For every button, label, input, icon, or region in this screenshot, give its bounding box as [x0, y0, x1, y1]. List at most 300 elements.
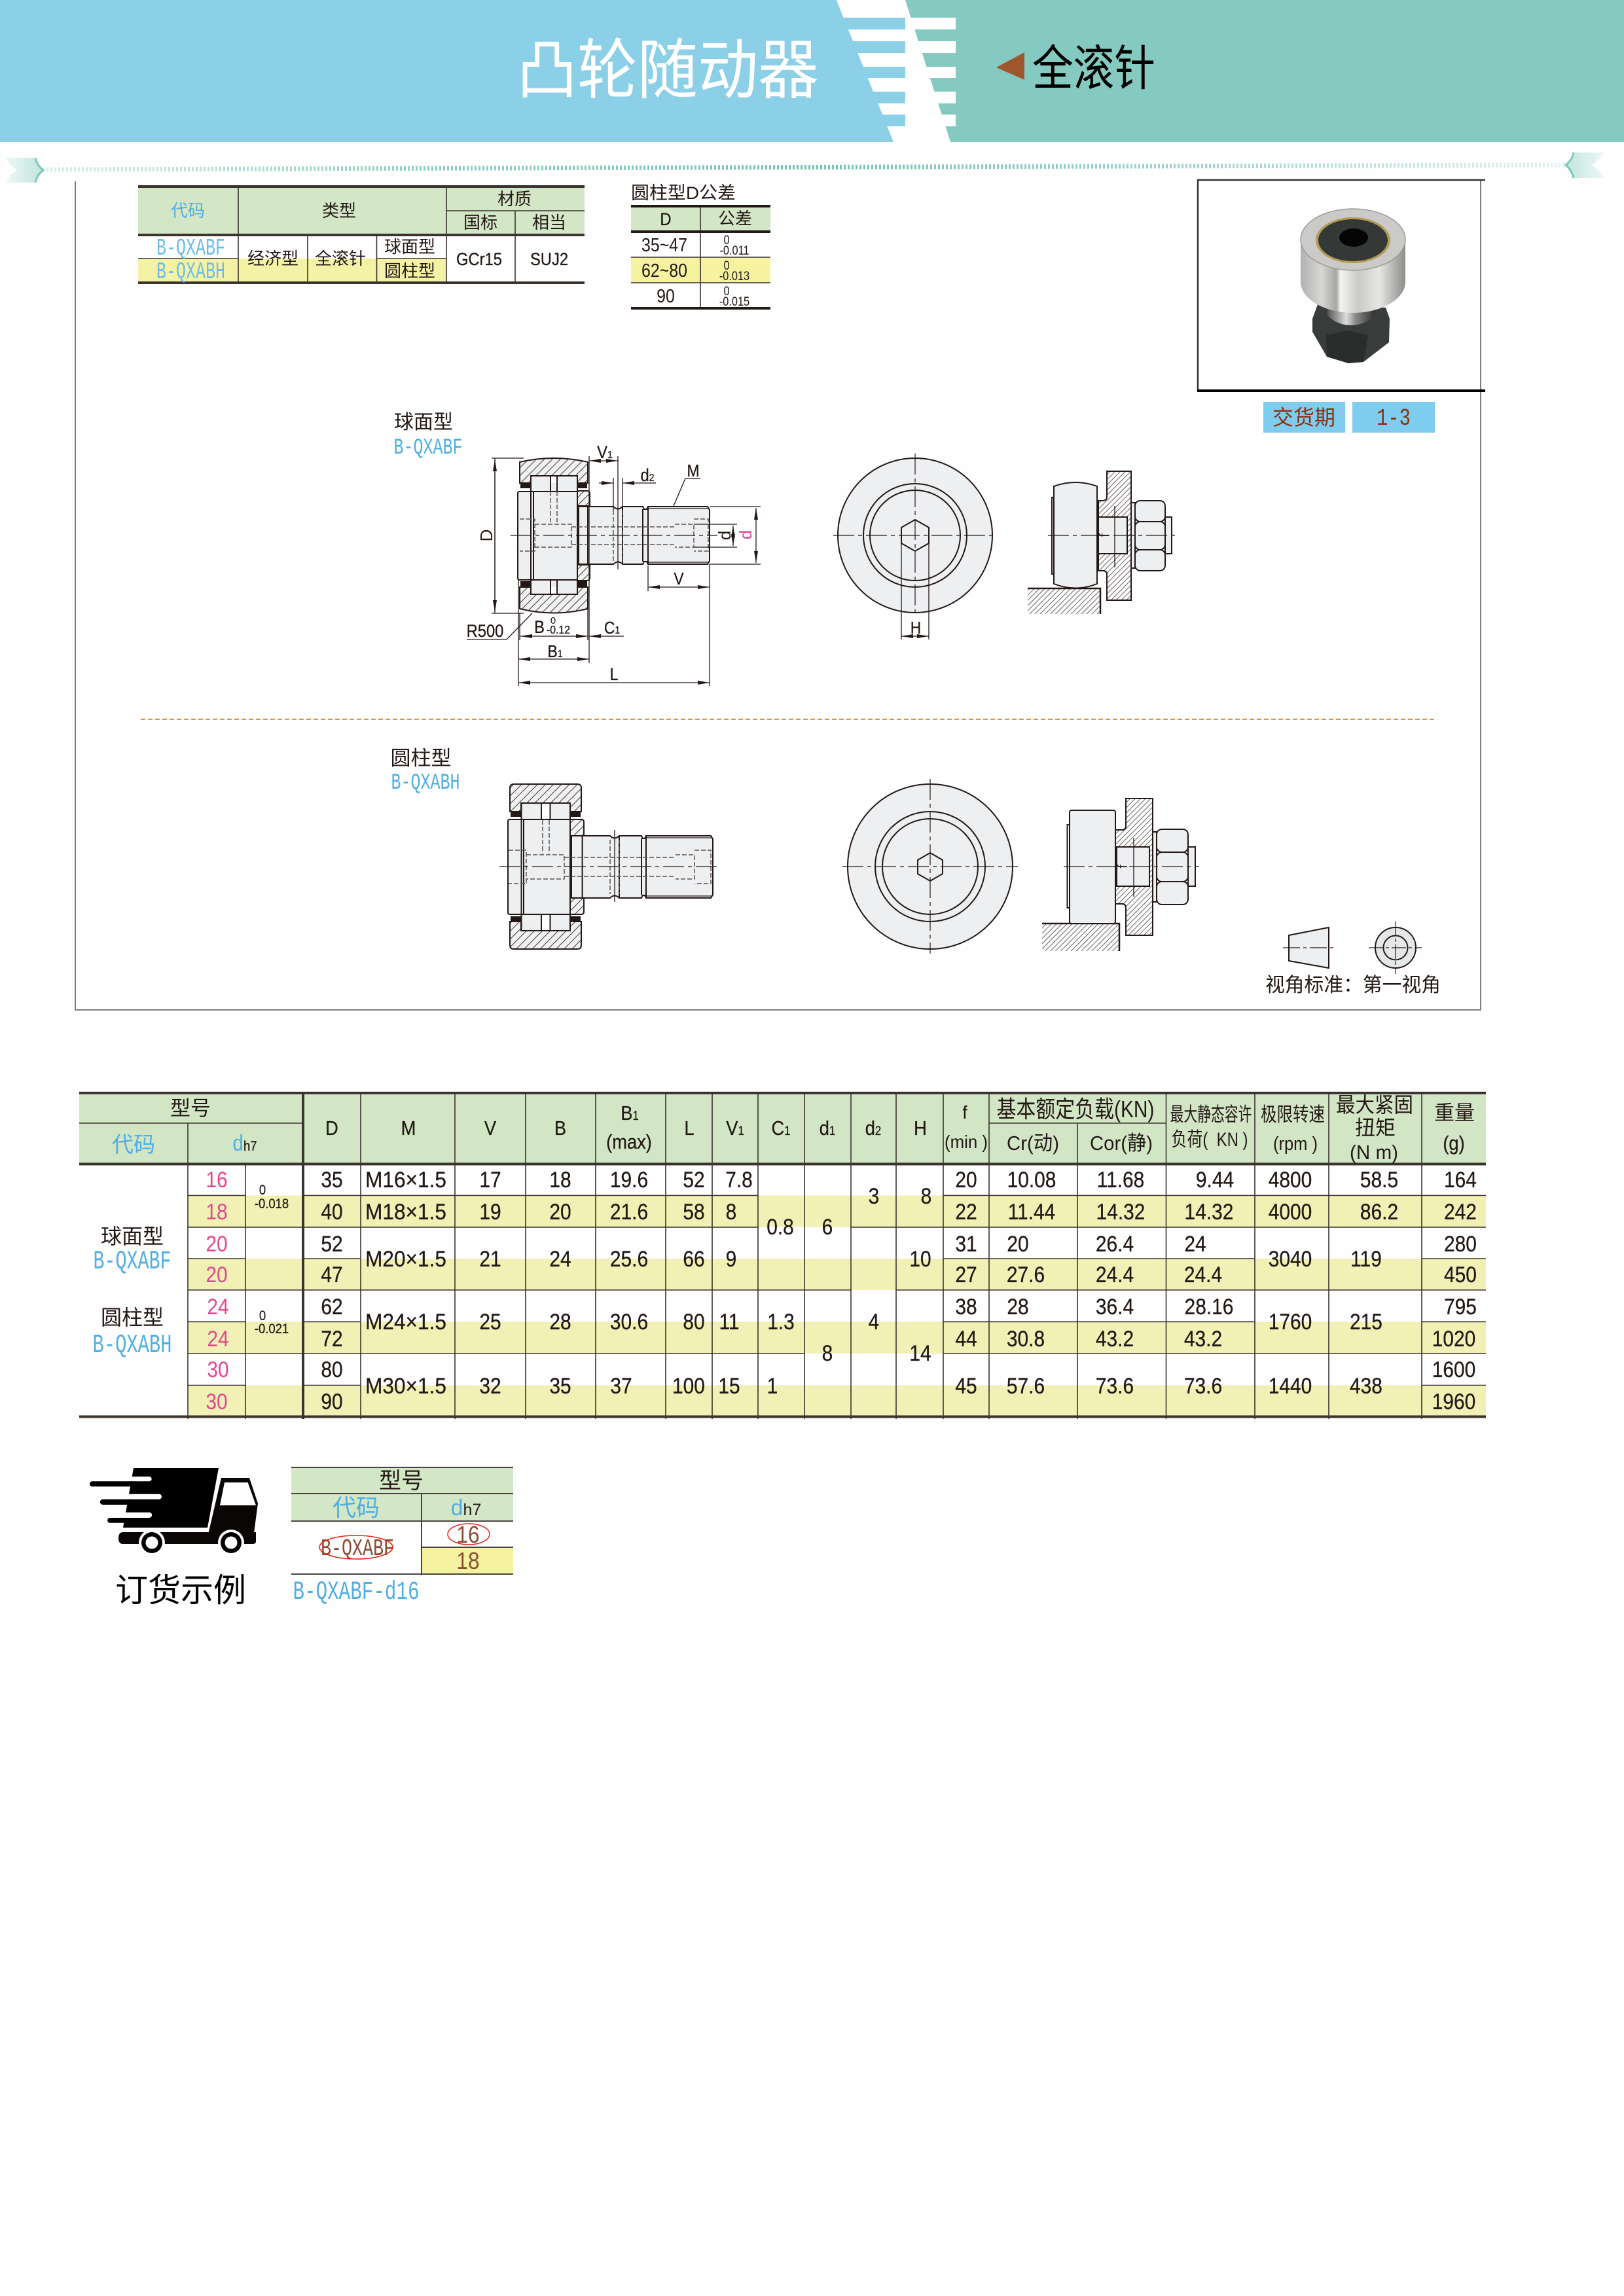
label V: V	[674, 570, 684, 588]
cone symbol	[1289, 927, 1329, 968]
value: 47	[321, 1262, 343, 1287]
shaft	[579, 507, 710, 564]
value: 0.8	[767, 1214, 794, 1239]
rpm heading: (rpm )	[1273, 1134, 1318, 1155]
value: 100	[672, 1373, 705, 1398]
header: blue left band	[0, 0, 893, 142]
truck box	[123, 1468, 219, 1528]
cylindrical type: 圆柱型	[101, 1306, 164, 1329]
d 20: 20	[206, 1231, 228, 1256]
tolerance value: -0.013	[719, 269, 749, 283]
left chevron edge	[35, 158, 43, 183]
cylindrical front view	[842, 779, 1018, 954]
material and type table	[138, 187, 585, 285]
value: 35	[321, 1167, 343, 1192]
V1 heading: V1	[726, 1117, 744, 1139]
code B-QXABF: B-QXABF	[156, 235, 225, 262]
value: 30.6	[610, 1309, 648, 1334]
heading: code: 代码	[171, 201, 205, 221]
max heading: (max)	[606, 1131, 652, 1153]
L column values	[672, 1167, 705, 1398]
zero: 0	[259, 1183, 266, 1198]
outer circle	[838, 458, 992, 613]
value: 438	[1350, 1373, 1382, 1398]
value: 4800	[1269, 1167, 1312, 1192]
hidden lines	[520, 492, 708, 562]
value: 3040	[1269, 1246, 1312, 1271]
value: 11.44	[1008, 1199, 1055, 1224]
icon: delivery truck	[90, 1468, 258, 1556]
heading: type: 类型	[322, 201, 356, 221]
cell: spherical: 球面型	[384, 237, 435, 257]
value: 10.08	[1007, 1167, 1056, 1192]
g heading: (g)	[1443, 1132, 1465, 1155]
dimension V1	[589, 460, 618, 461]
center line	[1048, 535, 1175, 536]
yellow row	[138, 259, 446, 283]
vertical rules	[188, 1093, 1422, 1419]
value: 73.6	[1184, 1373, 1222, 1398]
value: 52	[683, 1167, 705, 1192]
B heading: B	[554, 1117, 566, 1139]
value: 90	[321, 1389, 343, 1414]
value: 215	[1350, 1309, 1382, 1334]
value: M18×1.5	[365, 1199, 446, 1224]
icon: left chevron	[5, 158, 43, 183]
example header fill	[291, 1467, 513, 1521]
nut bottom segment	[1157, 882, 1188, 905]
tolerance thick rules	[631, 206, 770, 308]
label d pink: d	[736, 530, 755, 539]
d1 heading: d1	[820, 1117, 835, 1139]
heading: equivalent: 相当	[532, 213, 566, 232]
d 16: 16	[206, 1167, 228, 1192]
label d: d	[715, 531, 734, 540]
H column values	[909, 1183, 931, 1365]
stud head and body	[518, 492, 577, 580]
flange bottom	[570, 898, 584, 914]
stud shaft	[1098, 517, 1127, 554]
roller cap	[1052, 497, 1054, 574]
flange top	[577, 491, 590, 506]
dimension f	[1114, 506, 1115, 567]
f column values	[955, 1167, 977, 1398]
weight column values	[1432, 1167, 1477, 1414]
cell: GCr15: GCr15	[456, 250, 502, 269]
stud head and body	[508, 819, 570, 914]
B column values	[549, 1167, 571, 1398]
value: M16×1.5	[365, 1167, 446, 1192]
spherical code: B-QXABF	[394, 436, 462, 461]
roller top face	[1301, 209, 1405, 270]
cylindrical type label	[390, 747, 460, 796]
order example table	[291, 1467, 513, 1607]
value: 3	[869, 1183, 879, 1208]
legend text: 视角标准：第一视角	[1265, 975, 1441, 996]
value: 44	[955, 1326, 977, 1351]
rear wheel	[139, 1530, 165, 1556]
value: 20	[1007, 1231, 1029, 1256]
d 24: 24	[207, 1326, 229, 1351]
nut middle segment	[1157, 852, 1188, 882]
value: 21	[479, 1246, 501, 1271]
header banner	[0, 0, 1624, 142]
base block hatch	[1028, 588, 1100, 614]
front tire	[221, 1532, 242, 1553]
label B: B	[534, 618, 545, 637]
d 24: 24	[207, 1294, 229, 1319]
washer	[1153, 832, 1157, 902]
weight heading: 重量	[1434, 1102, 1475, 1124]
max torque heading: 最大紧固	[1336, 1093, 1413, 1117]
label M: M	[687, 462, 700, 480]
cam follower neck	[1327, 304, 1375, 325]
-0.018: -0.018	[255, 1196, 289, 1211]
brass ring	[1316, 217, 1390, 263]
d 30: 30	[206, 1389, 228, 1414]
heading tolerance: 公差	[718, 209, 752, 228]
N m heading: (N m)	[1350, 1141, 1398, 1164]
cylinder D tolerance table	[631, 183, 770, 310]
Cor heading: Cor(静)	[1090, 1132, 1153, 1155]
value: 28	[549, 1309, 571, 1334]
inner circle	[882, 819, 978, 914]
center line	[1064, 866, 1199, 867]
head separation	[531, 492, 533, 580]
cylindrical code: B-QXABH	[93, 1331, 171, 1361]
value: 19.6	[610, 1167, 648, 1192]
min heading: (min )	[945, 1132, 988, 1152]
value: M20×1.5	[365, 1246, 446, 1271]
value: 43.2	[1184, 1326, 1222, 1351]
dh7 heading: dh7	[232, 1130, 257, 1155]
cab	[203, 1478, 258, 1544]
value: 72	[321, 1326, 343, 1351]
value: 14.32	[1096, 1199, 1145, 1224]
circle around 16	[448, 1524, 490, 1545]
value: 280	[1444, 1231, 1477, 1256]
dimension d	[732, 526, 734, 546]
shaft steps	[579, 507, 648, 564]
roller	[1070, 810, 1115, 924]
outer ring top	[510, 784, 581, 812]
code B-QXABH: B-QXABH	[156, 259, 225, 285]
center lines	[833, 454, 997, 615]
f heading: f	[963, 1102, 967, 1122]
C1 column values	[767, 1214, 795, 1398]
value: 14.32	[1185, 1199, 1233, 1224]
product photo panel	[1197, 180, 1485, 391]
speed lines	[90, 1481, 134, 1523]
label H: H	[911, 619, 921, 637]
dimension L	[518, 682, 710, 683]
table grid	[138, 187, 585, 283]
value: 1600	[1432, 1357, 1475, 1382]
value: 30.8	[1007, 1326, 1045, 1351]
subtitle: 全滚针	[1032, 41, 1155, 96]
value: 24.4	[1184, 1262, 1222, 1287]
max static load heading: 最大静态容许	[1170, 1104, 1252, 1126]
thread line	[646, 838, 712, 896]
dimension C1	[589, 636, 624, 637]
stud end	[1165, 517, 1172, 554]
load KN heading: 负荷( KN )	[1172, 1129, 1248, 1151]
value: 18	[549, 1167, 571, 1192]
dimension B	[520, 636, 588, 637]
value: 26.4	[1096, 1231, 1134, 1256]
nut facet highlight	[1326, 331, 1368, 363]
yellow stripes	[188, 1195, 1486, 1416]
chassis	[118, 1532, 256, 1544]
delivery value	[1352, 402, 1435, 433]
base block outline	[1042, 924, 1119, 951]
value: 80	[321, 1357, 343, 1382]
dimension d2 left	[599, 482, 613, 484]
value: 8	[726, 1199, 736, 1224]
header: teal right band	[897, 0, 1624, 142]
value: 58	[683, 1199, 705, 1224]
V1 column values	[718, 1167, 753, 1398]
value: 62	[321, 1294, 343, 1319]
spherical type label	[394, 412, 462, 461]
value: 119	[1350, 1246, 1382, 1271]
washer	[1131, 503, 1135, 568]
value: 1020	[1432, 1326, 1475, 1351]
cam follower nut	[1312, 304, 1390, 363]
value: 73.6	[1096, 1373, 1134, 1398]
value: 86.2	[1360, 1199, 1398, 1224]
Cr heading: Cr(动)	[1007, 1132, 1059, 1155]
torque heading: 扭矩	[1355, 1117, 1396, 1139]
value: 9.44	[1196, 1167, 1234, 1192]
value: 1760	[1269, 1309, 1312, 1334]
thick rules	[79, 1092, 1486, 1419]
d 20: 20	[206, 1262, 228, 1287]
value: 58.5	[1360, 1167, 1398, 1192]
value: 14	[909, 1340, 931, 1365]
d2 heading: d2	[865, 1117, 881, 1139]
d values column	[206, 1167, 229, 1414]
value: 24.4	[1096, 1262, 1134, 1287]
table header fill	[138, 187, 585, 235]
value: 27.6	[1007, 1262, 1045, 1287]
0 value: 0	[723, 259, 730, 272]
model heading: 型号	[170, 1097, 211, 1120]
stud shaft	[1117, 847, 1149, 886]
value: 1.3	[767, 1309, 795, 1334]
icon: brown arrow	[996, 52, 1024, 80]
rated load heading: 基本额定负载(KN)	[996, 1096, 1155, 1122]
dimension f	[1133, 838, 1134, 897]
value: 450	[1444, 1262, 1477, 1287]
roller gaps	[551, 483, 556, 587]
C1 heading: C1	[771, 1117, 791, 1139]
value: 57.6	[1007, 1373, 1045, 1398]
value: 242	[1444, 1199, 1477, 1224]
nut middle segment	[1135, 522, 1165, 550]
cell: full needle: 全滚针	[315, 249, 366, 268]
label L: L	[610, 666, 618, 684]
center lines	[842, 779, 1018, 954]
inner circle	[870, 490, 960, 581]
tolerance table title: 圆柱型D公差	[631, 183, 736, 203]
0 value: 0	[723, 284, 730, 298]
value: 28.16	[1185, 1294, 1233, 1319]
heading: national standard: 国标	[463, 213, 497, 232]
value: 52	[321, 1231, 343, 1256]
value 18: 18	[456, 1548, 480, 1574]
rear tire	[141, 1532, 162, 1553]
dimension d2 right	[623, 482, 656, 484]
value: 66	[683, 1246, 705, 1271]
main specification table	[79, 1092, 1486, 1419]
table header row	[112, 1093, 1475, 1164]
speed column values	[1269, 1167, 1312, 1398]
value: 27	[955, 1262, 977, 1287]
rear hub	[145, 1537, 158, 1549]
value: 35	[549, 1373, 571, 1398]
value: 43.2	[1096, 1326, 1134, 1351]
label R500: R500	[467, 622, 503, 641]
front wheel halo	[218, 1530, 244, 1556]
head separation	[521, 819, 524, 914]
value: 20	[955, 1167, 977, 1192]
example yellow cell	[422, 1547, 513, 1574]
order example heading: 订货示例	[115, 1572, 246, 1609]
d 30: 30	[207, 1357, 229, 1382]
nut top segment	[1135, 501, 1165, 522]
shaft steps	[571, 836, 646, 898]
D 35~47: 35~47	[641, 234, 687, 255]
view standard legend	[1265, 922, 1441, 996]
stud end	[1188, 847, 1195, 886]
spherical heading: 球面型	[394, 412, 453, 433]
right chevron edge	[1566, 152, 1574, 178]
value: 15	[718, 1373, 740, 1398]
heading: material: 材质	[497, 189, 532, 209]
value: 8	[822, 1340, 833, 1365]
V heading: V	[484, 1117, 497, 1139]
rollers	[531, 476, 577, 594]
cone center line	[1283, 947, 1335, 948]
circle symbol inner	[1384, 936, 1407, 960]
value: 4	[869, 1309, 879, 1334]
cell: economy type: 经济型	[247, 249, 298, 268]
outer circle	[848, 784, 1013, 949]
delivery label text: 交货期	[1272, 406, 1335, 429]
mounting plate	[1098, 471, 1131, 600]
cylindrical section drawing	[499, 784, 719, 949]
zero: 0	[259, 1308, 266, 1323]
M column values	[365, 1167, 446, 1398]
header fill	[79, 1093, 1486, 1164]
header: white slanted stripe with teeth	[837, 0, 956, 142]
tolerance -0.12: -0.12	[547, 623, 570, 636]
value: 31	[955, 1231, 977, 1256]
heading dh7: dh7	[451, 1496, 481, 1520]
label f: f	[1098, 533, 1112, 537]
center line	[499, 866, 719, 867]
base block outline	[1028, 588, 1100, 614]
type labels column	[93, 1225, 171, 1361]
photo bottom rule	[1197, 389, 1485, 392]
leader R500	[467, 613, 532, 639]
d2 column values	[869, 1183, 879, 1334]
B1 heading: B1	[621, 1102, 639, 1124]
speed notches	[122, 1477, 162, 1518]
flange top	[570, 819, 584, 836]
header divider with chevrons	[5, 152, 1604, 183]
cylindrical code: B-QXABH	[391, 771, 460, 796]
nut bottom segment	[1135, 550, 1165, 571]
value: 11.68	[1097, 1167, 1144, 1192]
d 18: 18	[206, 1199, 228, 1224]
circle symbol outer	[1375, 927, 1416, 968]
tolerance yellow row	[631, 257, 770, 283]
value: M30×1.5	[365, 1373, 446, 1398]
value: 11	[719, 1309, 740, 1334]
label D: D	[477, 529, 496, 541]
hex socket	[901, 520, 929, 551]
value: 24	[549, 1246, 571, 1271]
value: 10	[909, 1246, 931, 1271]
h7 tolerance column	[255, 1183, 289, 1336]
base block hatch	[1042, 924, 1119, 951]
value: 25	[479, 1309, 501, 1334]
dimension H right	[915, 636, 929, 637]
D column values	[321, 1167, 343, 1414]
middle circle	[863, 484, 967, 587]
heading model: 型号	[379, 1469, 424, 1494]
hex socket	[1339, 228, 1368, 247]
value: 25.6	[610, 1246, 648, 1271]
tolerance value: -0.015	[719, 295, 749, 308]
thread line	[648, 509, 708, 562]
H heading: H	[914, 1117, 927, 1139]
value: 24	[1184, 1231, 1206, 1256]
leader M	[674, 478, 700, 506]
dimension H	[901, 636, 915, 637]
rear wheel halo	[139, 1530, 165, 1556]
L heading: L	[684, 1117, 695, 1139]
front hub	[225, 1537, 237, 1549]
dimension H extensions	[901, 543, 929, 639]
spherical type: 球面型	[101, 1225, 164, 1248]
code heading: 代码	[112, 1132, 155, 1157]
value: 22	[955, 1199, 977, 1224]
value: 28	[1007, 1294, 1029, 1319]
heading code: 代码	[333, 1494, 380, 1521]
dimension V	[648, 586, 710, 588]
divider between variants	[141, 719, 1435, 720]
value: 4000	[1269, 1199, 1312, 1224]
roller	[1054, 482, 1097, 588]
value: 795	[1444, 1294, 1477, 1319]
icon: right chevron	[1566, 152, 1604, 178]
value: 40	[321, 1199, 343, 1224]
spherical code: B-QXABF	[93, 1247, 171, 1277]
groove mark	[614, 830, 615, 902]
panel frame	[75, 180, 1481, 1010]
value: 45	[955, 1373, 977, 1398]
delivery time badge	[1263, 402, 1435, 433]
spherical section drawing	[467, 443, 761, 686]
circle center lines	[1369, 922, 1422, 974]
dimension D	[492, 458, 524, 613]
-0.021: -0.021	[255, 1321, 289, 1336]
D 90: 90	[657, 285, 675, 306]
rollers	[521, 803, 570, 931]
